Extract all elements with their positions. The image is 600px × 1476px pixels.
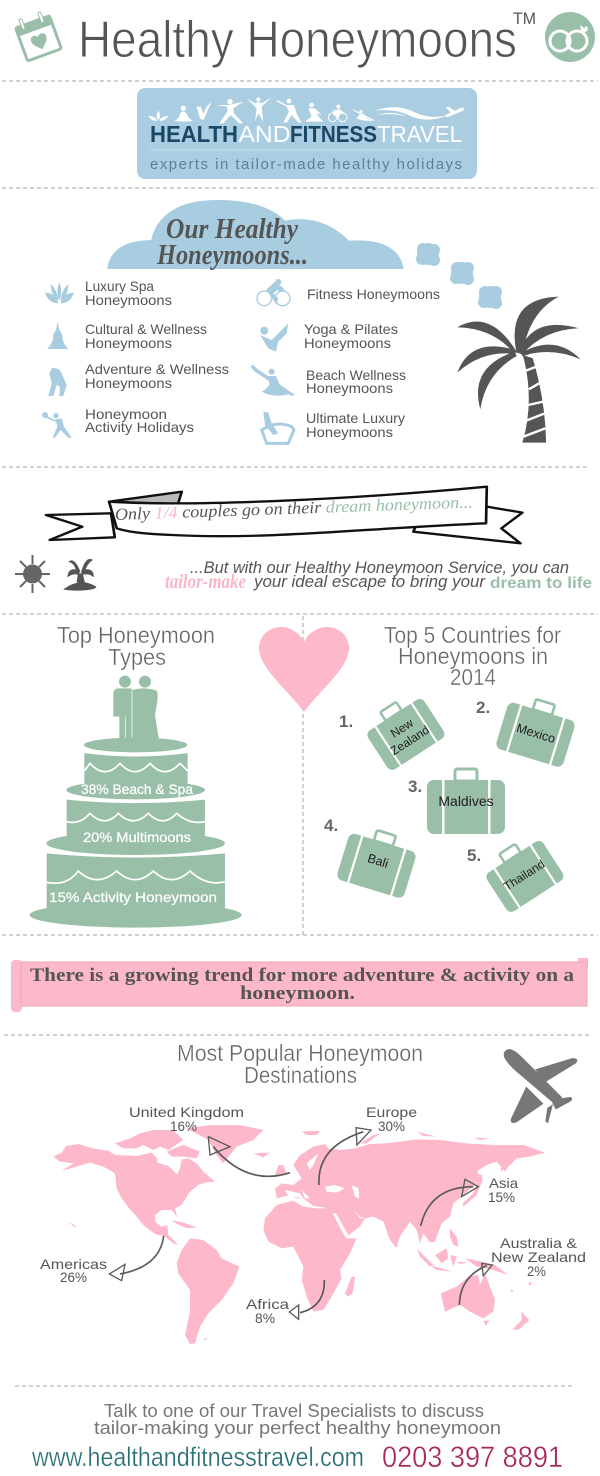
text: service line 2: your ideal escape to bring your xyxy=(253,572,486,591)
world map: americas xyxy=(53,1125,270,1344)
text: call to action xyxy=(94,1401,501,1438)
panel: popular destinations xyxy=(40,1040,586,1344)
logo wordmark: HEALTH xyxy=(150,121,238,147)
arrows xyxy=(109,1128,492,1319)
rank numbers: 5. xyxy=(467,846,481,865)
heading: our healthy honeymoons: Our Healthy xyxy=(166,213,298,245)
map labels: 15% xyxy=(488,1189,515,1205)
text: right column list xyxy=(304,286,440,440)
text: service line 1: ...But with our Healthy Honeymoon Service, you can xyxy=(190,558,569,577)
text: call to action: Talk to one of our Travel Specialists to discuss xyxy=(104,1401,484,1421)
map labels: Africa xyxy=(246,1296,289,1312)
icon: lotus xyxy=(45,283,74,303)
text: left column list: Adventure & Wellness xyxy=(85,361,229,377)
text: left column list xyxy=(85,278,229,435)
map labels: New Zealand xyxy=(491,1249,586,1265)
header xyxy=(12,9,595,69)
icon: palm tree xyxy=(457,297,581,443)
icon: heart xyxy=(259,627,349,712)
text: left column list: Honeymoons xyxy=(85,375,172,391)
arrow: asia xyxy=(421,1179,478,1226)
text: call to action: tailor-making your perfect healthy honeymoon xyxy=(94,1418,501,1438)
ribbon text: Only 1/4 couples go on their dream honeymoon... xyxy=(115,493,473,524)
heading xyxy=(57,622,215,670)
logo wordmark: TRAVEL xyxy=(377,121,462,147)
logo wordmark: AND xyxy=(238,121,290,147)
text: right column list: Fitness Honeymoons xyxy=(307,286,440,302)
arrow: australia xyxy=(459,1263,492,1305)
cloud xyxy=(107,200,404,269)
rank numbers: 2. xyxy=(476,698,490,717)
heading: Most Popular Honeymoon xyxy=(177,1040,423,1066)
map labels: United Kingdom xyxy=(129,1104,244,1120)
text: service line 2 xyxy=(165,571,592,593)
map labels: Australia & xyxy=(500,1235,578,1251)
panel: our healthy honeymoons xyxy=(42,200,581,443)
icon: island xyxy=(63,559,96,591)
callout: growing trend xyxy=(11,958,588,1012)
suitcase 5: Thailand xyxy=(501,857,547,894)
suitcase 2: Mexico xyxy=(515,721,557,746)
suitcase 3: Maldives xyxy=(438,793,494,809)
tier labels: 38% Beach & Spa xyxy=(81,781,193,797)
map labels: 26% xyxy=(60,1269,87,1285)
text: right column list: Honeymoons xyxy=(304,335,391,351)
text: left column list: Luxury Spa xyxy=(85,278,154,294)
logo activity icons xyxy=(148,97,464,123)
tier labels xyxy=(49,781,217,905)
panel: top 5 countries xyxy=(324,622,579,914)
logo tagline: experts in tailor-made healthy holidays xyxy=(150,156,462,173)
text: left column list: Cultural & Wellness xyxy=(85,321,207,337)
map labels: 16% xyxy=(170,1118,197,1134)
trademark: TM xyxy=(513,9,536,28)
tier labels: 15% Activity Honeymoon xyxy=(49,889,217,905)
suitcase 3 xyxy=(427,769,505,834)
heading: Honeymoons in xyxy=(398,643,548,669)
text: right column list: Beach Wellness xyxy=(306,367,406,383)
text: left column list: Activity Holidays xyxy=(85,419,194,435)
icon: tennis player xyxy=(42,412,72,438)
arrow: europe xyxy=(319,1128,371,1185)
text: left column list: Honeymoons xyxy=(85,292,172,308)
heading xyxy=(177,1040,423,1088)
icon: champagne bucket xyxy=(262,412,294,443)
title: Healthy Honeymoons xyxy=(78,11,517,69)
heading: our healthy honeymoons: Honeymoons... xyxy=(156,239,308,271)
heading: 2014 xyxy=(450,664,496,690)
map labels: 8% xyxy=(255,1310,275,1326)
heading: Types xyxy=(108,644,166,670)
panel: dream honeymoon banner xyxy=(15,487,592,593)
map labels: 2% xyxy=(527,1263,546,1279)
rank numbers xyxy=(324,698,490,865)
arrow: americas xyxy=(109,1236,164,1281)
rank numbers: 4. xyxy=(324,816,338,835)
icon: calendar with heart xyxy=(12,9,62,61)
map labels: Europe xyxy=(366,1104,417,1120)
suitcase 2 xyxy=(495,692,579,768)
text: left column list: Honeymoons xyxy=(85,335,172,351)
map labels: Americas xyxy=(40,1256,107,1272)
website url: www.healthandfitnesstravel.com xyxy=(31,1442,364,1472)
world map: eurasia, africa, oceania xyxy=(260,1131,545,1330)
honeymoon type icons xyxy=(42,279,295,443)
wedding cake xyxy=(30,676,242,928)
text: service line 2: tailor-make xyxy=(165,571,246,593)
text: right column list: Honeymoons xyxy=(306,380,393,396)
tier labels: 20% Multimoons xyxy=(83,829,191,845)
text: right column list: Ultimate Luxury xyxy=(306,410,405,426)
footer xyxy=(31,1401,563,1474)
map inland seas xyxy=(285,1153,365,1237)
text: left column list: Honeymoon xyxy=(85,406,167,422)
icon: sun xyxy=(15,555,50,593)
text: right column list: Yoga & Pilates xyxy=(304,321,398,337)
icon: temple xyxy=(47,322,68,349)
heading: our healthy honeymoons xyxy=(156,213,308,271)
rank numbers: 3. xyxy=(408,777,422,796)
suitcase 4 xyxy=(336,823,420,899)
suitcase 1 xyxy=(360,689,447,772)
phone number: 0203 397 8891 xyxy=(382,1441,563,1474)
logo wordmark: FITNESS xyxy=(290,121,377,147)
arrow: africa xyxy=(289,1280,324,1319)
panel: top honeymoon types xyxy=(30,622,242,928)
heading: Top 5 Countries for xyxy=(384,622,561,648)
heading: Destinations xyxy=(244,1062,357,1088)
text: service line 2: dream to life xyxy=(490,575,592,592)
suitcase 1: New xyxy=(388,716,416,741)
logo wordmark xyxy=(150,121,462,147)
map labels xyxy=(40,1104,586,1326)
ribbon xyxy=(46,487,522,543)
logo panel xyxy=(137,88,477,179)
suitcase 4: Bali xyxy=(366,851,390,871)
icon: cyclist xyxy=(257,279,290,306)
map labels: 30% xyxy=(378,1118,405,1134)
map labels: Asia xyxy=(489,1175,518,1191)
icon: hiker xyxy=(48,368,67,396)
callout: growing trend: There is a growing trend for more adventure & activity on a xyxy=(30,965,575,986)
suitcase 5 xyxy=(479,831,566,914)
text: right column list: Honeymoons xyxy=(306,424,393,440)
arrow: united kingdom xyxy=(208,1137,290,1176)
callout: growing trend: honeymoon. xyxy=(240,983,355,1004)
suitcase 1: Zealand xyxy=(388,723,432,758)
thought bubbles xyxy=(416,243,502,309)
heading xyxy=(384,622,561,690)
icon: yoga pose xyxy=(260,323,288,352)
icon: airplane xyxy=(504,1049,577,1123)
rank numbers: 1. xyxy=(339,712,353,731)
heading: Top Honeymoon xyxy=(57,622,215,648)
icon: wedding rings xyxy=(545,12,595,62)
bride and groom xyxy=(113,676,159,744)
icon: kayaker xyxy=(251,365,295,396)
